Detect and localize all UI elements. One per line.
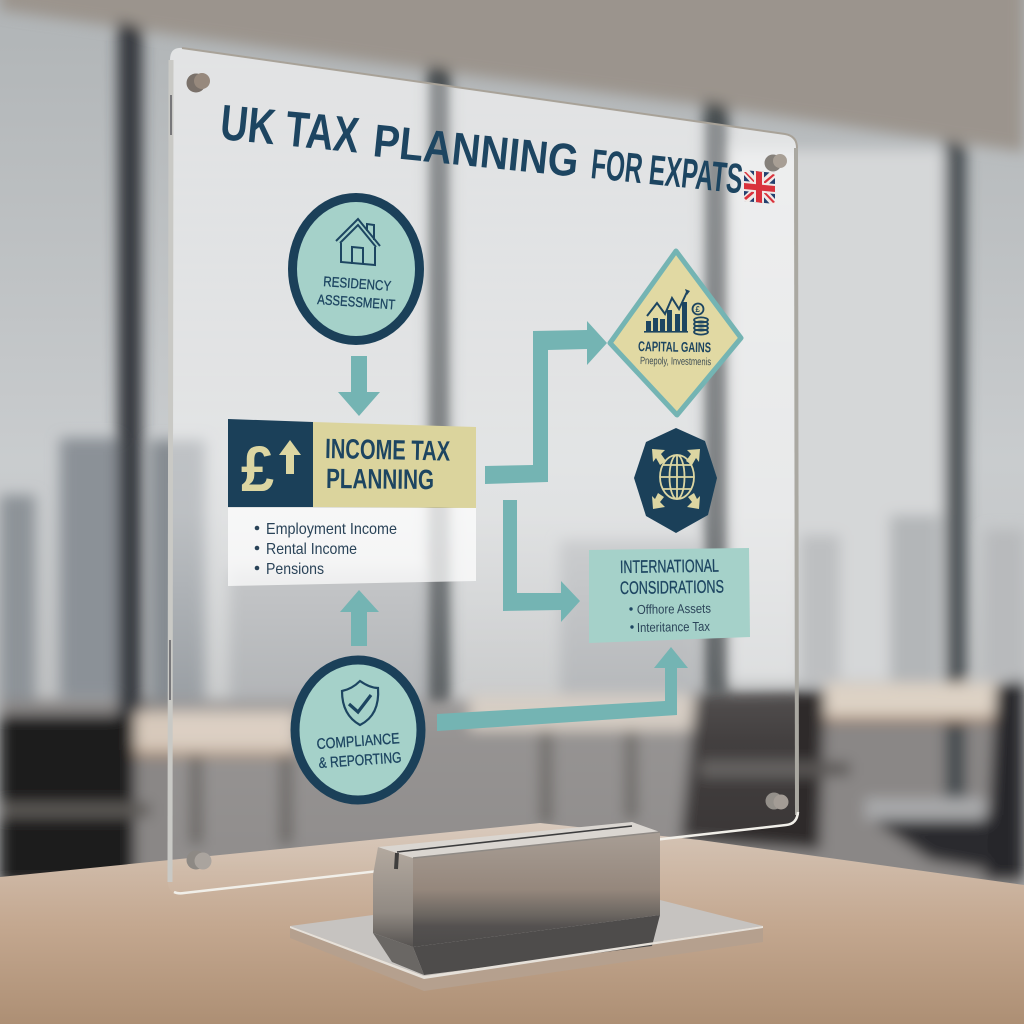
panel: international considerations: INTERNATIONAL [620, 556, 719, 577]
standoff bolt: top right [764, 154, 787, 172]
label: residency assessment: ASSESSMENT [317, 291, 396, 312]
label: compliance and reporting: & REPORTING [318, 749, 402, 772]
arrow: income tax to capital gains [485, 321, 607, 484]
standoff bolt: bottom left [186, 850, 212, 870]
title [218, 94, 745, 202]
panel: income tax planning [228, 419, 476, 586]
icon: house [336, 219, 380, 265]
title: UK TAX [218, 94, 362, 164]
bullet list [255, 521, 397, 578]
icon: UK flag [744, 170, 775, 204]
header title block: PLANNING [326, 463, 434, 495]
icon: growth chart [644, 289, 690, 333]
circle: residency assessment [292, 198, 420, 340]
arrow: income tax to international [503, 500, 580, 622]
metal stand block [373, 822, 660, 947]
icon: coins [692, 304, 708, 335]
icon: globe [660, 455, 694, 499]
icon: coins: £ [696, 305, 700, 314]
label: compliance and reporting [316, 730, 402, 772]
label: residency assessment: RESIDENCY [323, 273, 392, 294]
panel: international considerations: CONSIDRATIONS [620, 577, 724, 598]
label: capital gains: CAPITAL GAINS [638, 338, 711, 355]
glass plaque [168, 48, 798, 893]
bullet list: Employment Income [266, 521, 397, 538]
bullet list: Pensions [266, 561, 324, 578]
panel: international considerations: Offhore Assets [637, 601, 711, 617]
title: PLANNING [371, 114, 581, 187]
bullet list: Rental Income [266, 541, 357, 558]
icon: outward arrows [652, 449, 700, 509]
icon: pound sign: £ [241, 433, 274, 505]
standoff bolt: bottom right [766, 792, 788, 810]
sublabel: property, investments: Pnepoly, Investmenis [640, 355, 711, 368]
bullet panel background [228, 508, 476, 586]
arrow: residency to income tax [338, 356, 380, 416]
table top [0, 823, 1024, 1024]
arrow: compliance to income tax [340, 590, 379, 646]
panel: international considerations [589, 548, 750, 643]
label: residency assessment [317, 273, 396, 312]
panel: international considerations: Interitance Tax [637, 619, 710, 635]
label: compliance and reporting: COMPLIANCE [316, 730, 400, 753]
header title block: INCOME TAX [325, 433, 451, 467]
header title block [313, 422, 476, 508]
circle: compliance and reporting [295, 660, 421, 800]
title: FOR EXPATS [589, 140, 745, 202]
metal stand base [290, 900, 763, 991]
header icon block [228, 419, 313, 507]
octagon: globe icon [634, 428, 717, 533]
icon: shield with check [342, 681, 378, 725]
diamond: capital gains [610, 251, 741, 415]
icon: up arrow [279, 440, 301, 474]
standoff bolt: top left [186, 73, 210, 92]
arrow: compliance to international [437, 647, 688, 731]
